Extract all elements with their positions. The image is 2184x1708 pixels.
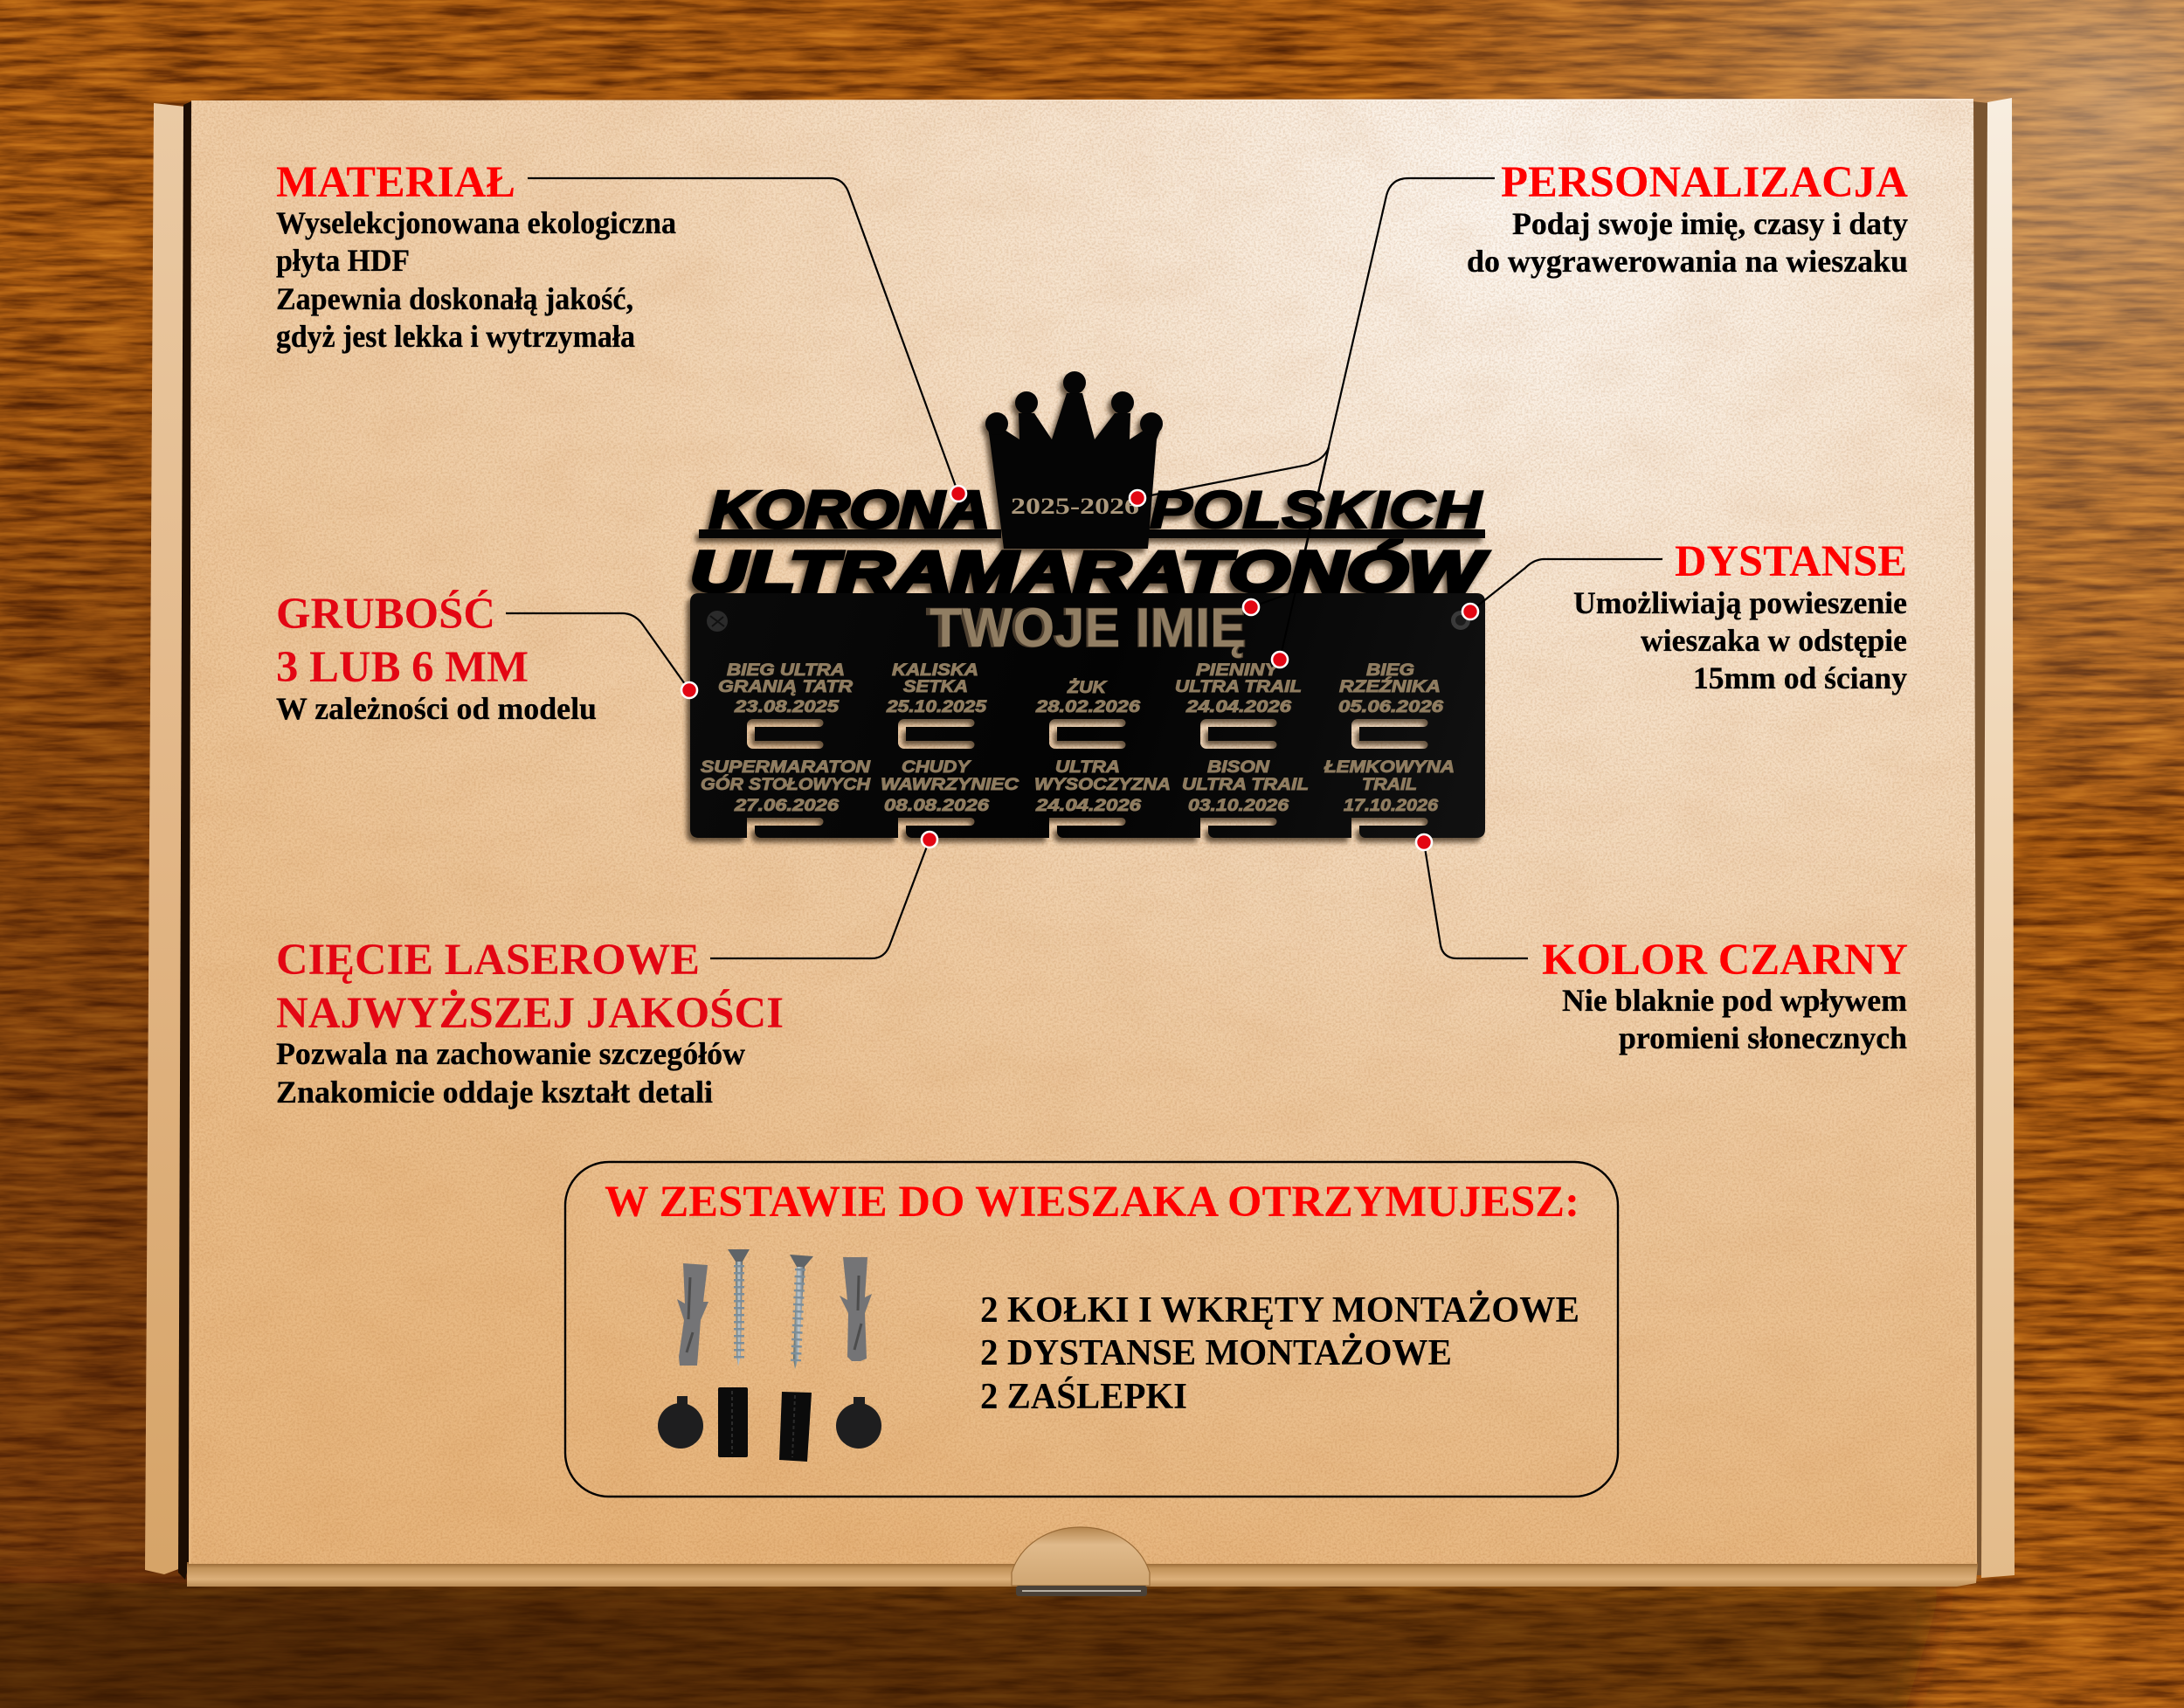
text block: material: Wyselekcjonowana ekologiczna	[276, 205, 676, 240]
text block: personalization: Podaj swoje imię, czasy i daty	[1512, 206, 1908, 241]
kit list: 2 DYSTANSE MONTAŻOWE	[980, 1332, 1452, 1373]
text block: distances: 15mm od ściany	[1693, 660, 1907, 695]
kit heading: W ZESTAWIE DO WIESZAKA OTRZYMUJESZ:	[605, 1178, 1579, 1227]
icon: screw right	[790, 1255, 813, 1369]
kit list: 2 ZAŚLEPKI	[980, 1376, 1187, 1417]
right dark gap	[1973, 101, 1988, 1575]
hanger crown	[985, 371, 1163, 549]
race list	[701, 660, 1455, 815]
icon: wall plug left	[677, 1263, 708, 1366]
race list: ULTRA	[1055, 757, 1120, 777]
icon: screw left	[728, 1249, 750, 1366]
race list: ULTRA TRAIL	[1175, 677, 1302, 696]
text block: laser cutting: Pozwala na zachowanie szczegółów	[276, 1036, 745, 1071]
race list: SUPERMARATON	[701, 757, 871, 777]
icon: wall plug right	[840, 1257, 872, 1361]
race list: ŻUK	[1067, 677, 1108, 697]
hanger title polskich: POLSKICH	[1150, 481, 1483, 539]
race list: TRAIL	[1362, 775, 1417, 794]
line: personalization	[1280, 178, 1495, 660]
text block: material: płyta HDF	[276, 243, 410, 278]
box lid	[189, 99, 1977, 1564]
text block: material: Zapewnia doskonałą jakość,	[276, 281, 633, 316]
panel: included kit	[565, 1162, 1618, 1497]
text block: personalization	[1467, 158, 1908, 279]
text block: distances: wieszaka w odstępie	[1641, 623, 1907, 658]
race list: 24.04.2026	[1185, 697, 1291, 716]
race list: BIEG ULTRA	[727, 660, 845, 680]
text block: distances: Umożliwiają powieszenie	[1573, 585, 1907, 620]
icon: spacer left	[718, 1387, 748, 1457]
icon: cap left	[658, 1396, 703, 1449]
text block: colour	[1542, 936, 1908, 1055]
text block: thickness: W zależności od modelu	[276, 691, 597, 726]
name text twoje imie: TWOJE IMIĘ	[926, 598, 1247, 659]
thumb notch	[1012, 1527, 1150, 1596]
race list: 05.06.2026	[1338, 697, 1443, 716]
race list: PIENINY	[1196, 660, 1280, 680]
bottom box flap	[187, 1562, 1978, 1587]
left box flap	[145, 103, 185, 1574]
name text twoje imie: TWOJE IMIĘ	[930, 598, 1246, 659]
race list: GRANIĄ TATR	[718, 677, 853, 696]
line: laser cutting	[710, 840, 930, 958]
callout lines	[506, 178, 1662, 958]
race list: WYSOCZYZNA	[1034, 775, 1171, 794]
text block: distances	[1573, 537, 1907, 695]
right box flap	[1981, 98, 2015, 1578]
text block: personalization: PERSONALIZACJA	[1501, 158, 1908, 207]
race list: ŁEMKOWYNA	[1324, 757, 1455, 777]
line: distances	[1470, 559, 1662, 612]
text block: colour: Nie blaknie pod wpływem	[1562, 983, 1907, 1018]
hanger title korona: KORONA	[709, 481, 990, 539]
race list: KALISKA	[892, 660, 978, 680]
text block: thickness	[276, 590, 597, 726]
text block: distances: DYSTANSE	[1675, 537, 1907, 586]
race list: 08.08.2026	[884, 796, 989, 815]
kit list	[980, 1290, 1579, 1417]
icon: cap right	[836, 1397, 881, 1449]
race list: 24.04.2026	[1035, 796, 1141, 815]
hanger bars	[699, 529, 1485, 538]
race list: 03.10.2026	[1188, 796, 1289, 815]
text block: material: MATERIAŁ	[276, 158, 515, 207]
race list: 27.06.2026	[734, 796, 839, 815]
text block: laser cutting: CIĘCIE LASEROWE	[276, 936, 700, 985]
race list: BIEG	[1366, 660, 1414, 680]
race list: GÓR STOŁOWYCH	[701, 774, 871, 794]
text block: thickness: GRUBOŚĆ	[276, 590, 495, 639]
left dark gap	[178, 101, 191, 1580]
race list: 17.10.2026	[1344, 796, 1438, 815]
line: crown branch	[1137, 447, 1329, 498]
race list: BISON	[1207, 757, 1270, 777]
text block: colour: KOLOR CZARNY	[1542, 936, 1908, 985]
line: thickness	[506, 613, 689, 690]
text block: material: gdyż jest lekka i wytrzymała	[276, 319, 635, 354]
hanger plate with hook slots	[690, 593, 1485, 838]
callout dots	[681, 486, 1478, 850]
race list: 25.10.2025	[886, 697, 987, 716]
line: material	[528, 178, 958, 494]
race list: 28.02.2026	[1035, 697, 1140, 716]
race list: WAWRZYNIEC	[881, 775, 1019, 794]
text block: personalization: do wygrawerowania na wieszaku	[1467, 244, 1908, 279]
race list: 23.08.2025	[734, 697, 840, 716]
race list: RZEŹNIKA	[1339, 676, 1441, 696]
line: name branch	[1251, 447, 1329, 607]
race list: CHUDY	[902, 757, 971, 777]
text block: laser cutting: NAJWYŻSZEJ JAKOŚCI	[276, 989, 784, 1038]
line: colour	[1424, 842, 1528, 958]
product: black medal hanger	[690, 371, 1488, 838]
icon: spacer right	[779, 1392, 812, 1462]
mounting screw left	[707, 611, 728, 632]
text block: thickness: 3 LUB 6 MM	[276, 643, 529, 692]
text block: material	[276, 158, 676, 354]
text block: colour: promieni słonecznych	[1619, 1020, 1907, 1055]
hanger title ultramaratonow: ULTRAMARATONÓW	[690, 539, 1488, 604]
text block: laser cutting	[276, 936, 784, 1110]
kit list: 2 KOŁKI I WKRĘTY MONTAŻOWE	[980, 1290, 1579, 1331]
text block: laser cutting: Znakomicie oddaje kształt detali	[276, 1075, 713, 1110]
cardboard box	[145, 98, 2015, 1596]
mounting spacer right	[1451, 611, 1470, 630]
cardboard lighting and grain	[189, 99, 1977, 1564]
race list: SETKA	[903, 677, 968, 696]
race list: ULTRA TRAIL	[1182, 775, 1309, 794]
year text: 2025-2026	[1011, 494, 1139, 519]
